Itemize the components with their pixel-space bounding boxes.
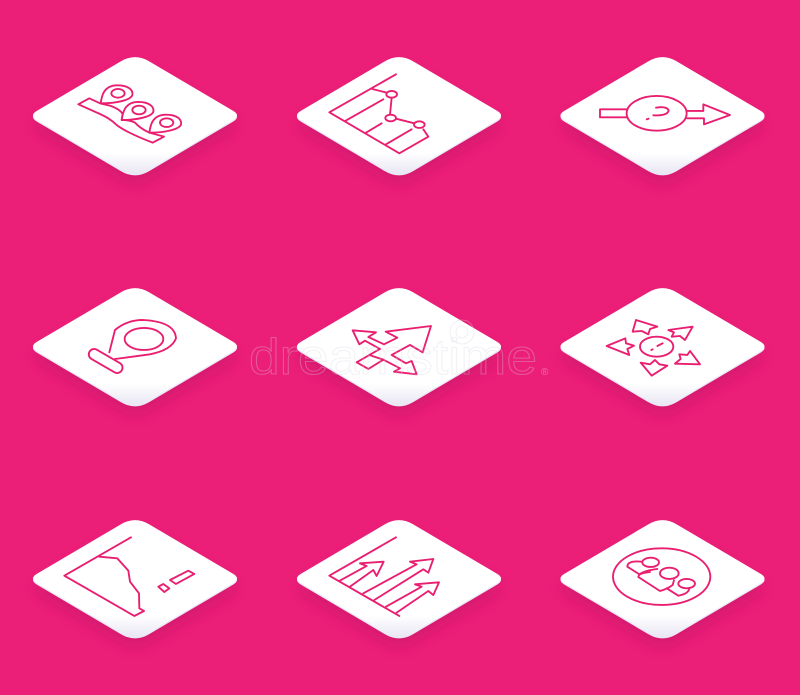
- icon: map pin with base: [87, 320, 176, 375]
- icon: falling area chart with legend: [64, 537, 194, 616]
- icon: question circle between input and output arrow: [600, 96, 730, 131]
- icon: four arrows crossing: [353, 326, 431, 374]
- watermark: ®: [541, 367, 549, 378]
- icon: three people in a circle: [613, 548, 710, 605]
- panel: location pins on road: [33, 57, 237, 184]
- panel: group of people: [560, 520, 764, 647]
- panel: arrows around exclamation: [560, 288, 764, 415]
- panel: large location pin: [33, 288, 237, 415]
- panel: rising arrows chart: [297, 520, 501, 647]
- panel: multi-direction arrows: [297, 288, 501, 415]
- panel: declining line chart: [297, 57, 501, 184]
- panel: area chart: [33, 520, 237, 647]
- icon: line chart with nodes: [329, 74, 428, 153]
- icon: five arrows radiating from circle: [607, 320, 700, 376]
- icon: three map pins on a road: [78, 85, 181, 143]
- watermark: dreamstime: [249, 329, 537, 385]
- panel: question with arrow: [560, 57, 764, 184]
- icon: chart with three rising arrows: [329, 537, 439, 616]
